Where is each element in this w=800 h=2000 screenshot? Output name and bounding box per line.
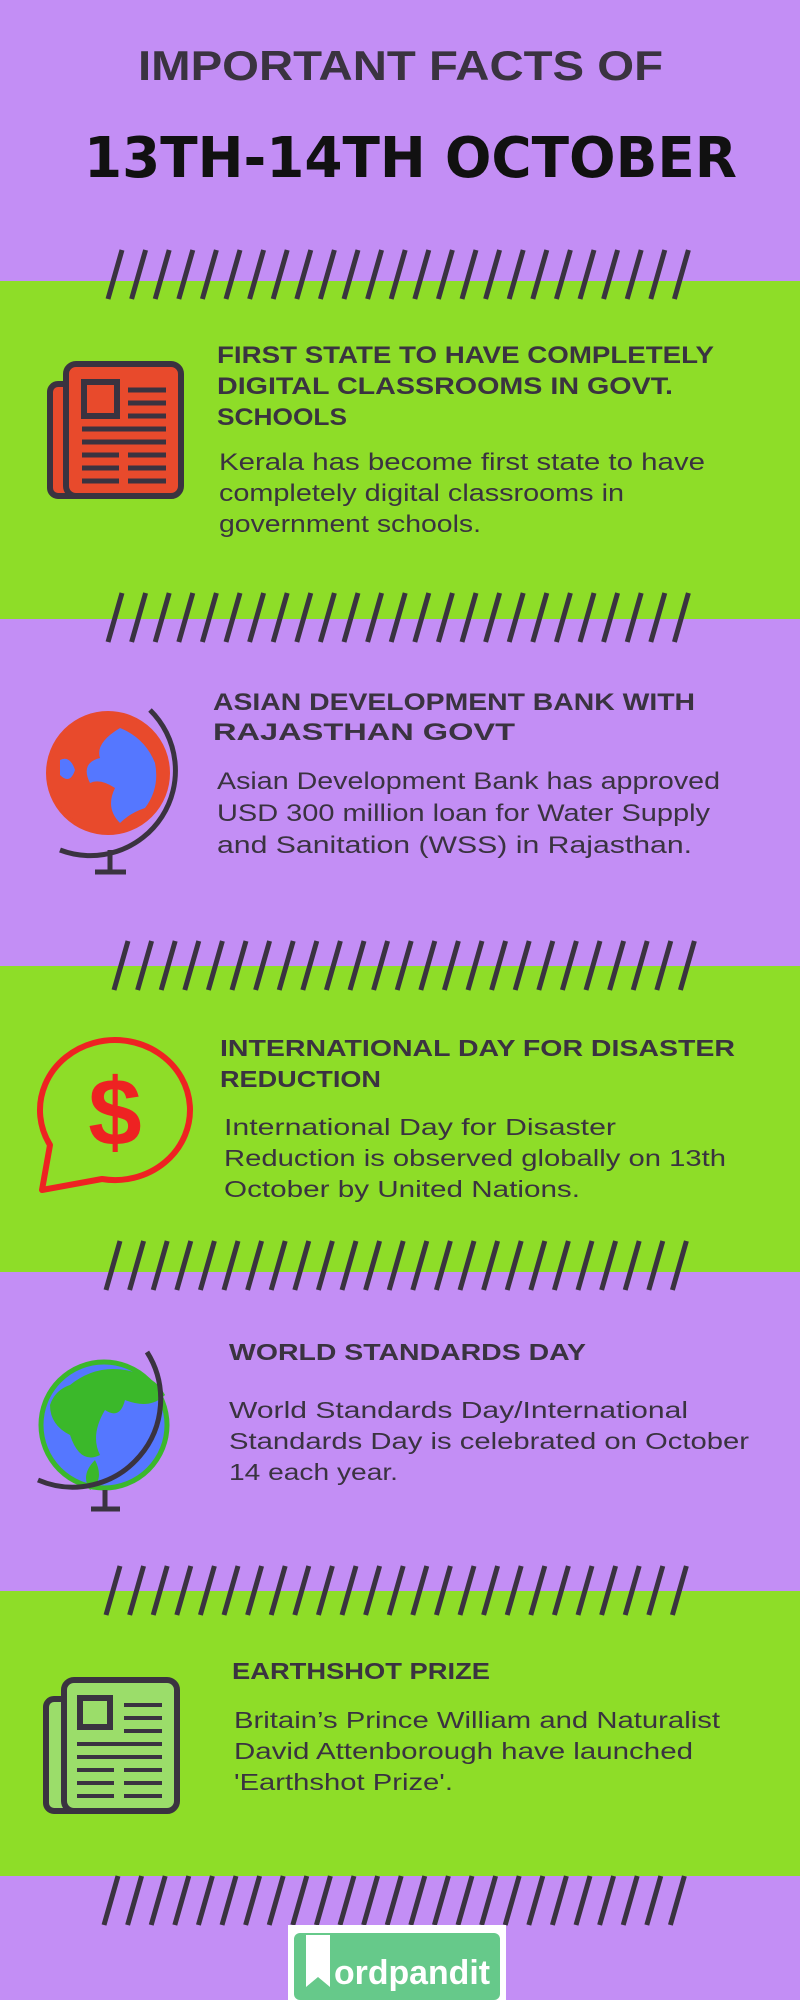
logo: wordpandit: ordpandit [334, 1954, 490, 1992]
panel 4: World Standards Day [38, 1339, 749, 1509]
heading: DIGITAL CLASSROOMS IN GOVT. [217, 373, 673, 400]
body text: 14 each year. [229, 1459, 398, 1485]
body text [224, 1114, 726, 1202]
heading: FIRST STATE TO HAVE COMPLETELY [217, 342, 714, 369]
icon: orange globe [48, 710, 175, 872]
icon: red newspaper [50, 364, 181, 496]
body text: International Day for Disaster [224, 1114, 616, 1140]
title: IMPORTANT FACTS OF [138, 42, 663, 89]
heading [217, 342, 714, 431]
panel 2: ADB Rajasthan [48, 689, 720, 872]
heading: RAJASTHAN GOVT [213, 719, 515, 746]
body text: Asian Development Bank has approved [217, 768, 720, 795]
heading: REDUCTION [220, 1066, 381, 1092]
body text: completely digital classrooms in [219, 480, 624, 507]
body text: Kerala has become first state to have [219, 449, 705, 476]
heading [220, 1035, 735, 1092]
title [84, 42, 737, 191]
icon: green newspaper [46, 1680, 177, 1811]
body text: Standards Day is celebrated on October [229, 1428, 749, 1454]
body text: October by United Nations. [224, 1176, 580, 1202]
panel 1: digital classrooms [50, 342, 714, 538]
body text: Reduction is observed globally on 13th [224, 1145, 726, 1171]
icon: dollar speech bubble [40, 1040, 190, 1190]
heading: WORLD STANDARDS DAY [229, 1339, 586, 1365]
panel 3: Disaster reduction [40, 1035, 735, 1202]
body text: 'Earthshot Prize'. [234, 1769, 453, 1795]
body text: Britain’s Prince William and Naturalist [234, 1707, 721, 1733]
body text [229, 1397, 749, 1485]
icon: green globe [38, 1352, 167, 1509]
icon: dollar speech bubble: $ [88, 1059, 142, 1166]
body text [217, 768, 720, 859]
body text [219, 449, 705, 538]
heading: ASIAN DEVELOPMENT BANK WITH [213, 689, 695, 716]
body text: World Standards Day/International [229, 1397, 688, 1423]
panel 5: Earthshot Prize [46, 1658, 721, 1811]
body text: government schools. [219, 511, 481, 538]
title: 13TH-14TH OCTOBER [84, 126, 737, 191]
heading [213, 689, 695, 746]
body text [234, 1707, 721, 1795]
body text: David Attenborough have launched [234, 1738, 693, 1764]
heading: INTERNATIONAL DAY FOR DISASTER [220, 1035, 735, 1061]
body text: USD 300 million loan for Water Supply [217, 800, 710, 827]
logo: wordpandit [288, 1925, 506, 2000]
body text: and Sanitation (WSS) in Rajasthan. [217, 832, 692, 859]
heading: EARTHSHOT PRIZE [232, 1658, 490, 1684]
heading: SCHOOLS [217, 404, 347, 431]
